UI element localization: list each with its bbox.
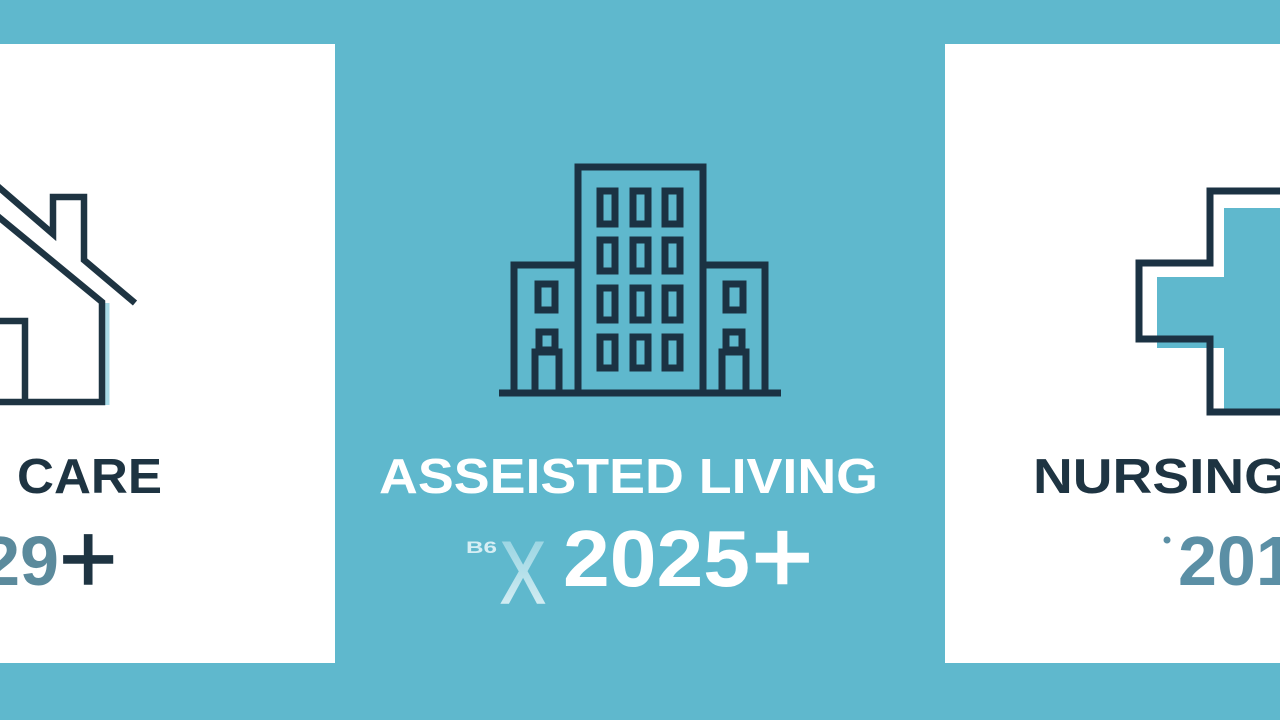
panel background: home care (0, 44, 335, 663)
year: 29+: + (59, 503, 117, 615)
year: 29+ (0, 503, 117, 615)
heading: nursing: NURSING (1033, 450, 1280, 504)
panel: assisted living (379, 167, 878, 622)
icon: apartment building (499, 167, 781, 393)
year: 2025+: + (752, 499, 813, 615)
panel: nursing home (945, 44, 1280, 663)
panel background: nursing home (945, 44, 1280, 663)
heading: care: CARE (17, 450, 162, 504)
icon: medical cross (1139, 191, 1280, 412)
small label: B6: B6 (466, 538, 497, 557)
panel: home care (0, 44, 335, 663)
icon: stylised X: X (500, 524, 546, 622)
year: 2025+: 2025 (563, 514, 750, 603)
icon: house (0, 184, 135, 405)
year: 2025+ (563, 499, 813, 615)
heading: assisted living: ASSEISTED LIVING (379, 450, 878, 504)
